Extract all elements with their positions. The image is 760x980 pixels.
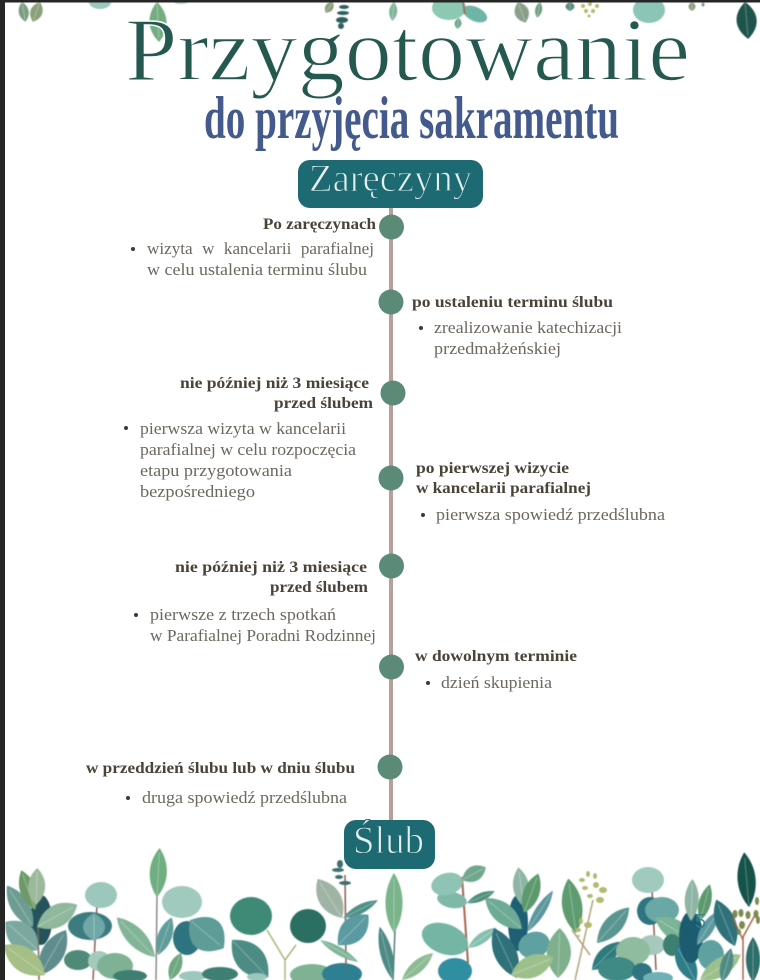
step 3: nie później niż 3 miesiące: przed ślubem bbox=[274, 395, 374, 412]
end box: Ślub: Ślub bbox=[353, 818, 424, 862]
start box: Zaręczyny: Zaręczyny bbox=[309, 157, 472, 200]
step 7: w przeddzień ślubu: druga spowiedź przedślubna bbox=[142, 788, 348, 807]
step 6: w dowolnym terminie: dzień skupienia bbox=[441, 673, 553, 692]
step 5: nie później niż 3 miesiące: nie później niż 3 miesiące bbox=[175, 559, 367, 576]
step 4: po pierwszej wizycie bbox=[378, 460, 666, 524]
step 3: nie później niż 3 miesiące: nie później niż 3 miesiące bbox=[180, 375, 369, 392]
step 3: nie później niż 3 miesiące: bezpośredniego bbox=[140, 482, 255, 501]
step 3: nie później niż 3 miesiące: parafialnej w celu rozpoczęcia bbox=[140, 440, 357, 459]
step 1: Po zaręczynach: wizyta w kancelarii parafialnej bbox=[147, 239, 374, 258]
step 5: nie później niż 3 miesiące: w Parafialnej Poradni Rodzinnej bbox=[150, 626, 376, 645]
step 7: w przeddzień ślubu: w przeddzień ślubu lub w dniu ślubu bbox=[86, 760, 355, 777]
step 6: w dowolnym terminie bbox=[379, 648, 577, 692]
step 1: Po zaręczynach bbox=[131, 214, 404, 279]
bottom foliage border bbox=[0, 848, 760, 980]
step 4: po pierwszej wizycie: w kancelarii parafialnej bbox=[416, 480, 591, 497]
step 5: nie później niż 3 miesiące: przed ślubem bbox=[270, 579, 369, 596]
foliage: stem with round leaves bbox=[417, 861, 500, 980]
step 6: w dowolnym terminie: w dowolnym terminie bbox=[415, 648, 577, 665]
foliage: round eucalyptus bbox=[64, 882, 147, 980]
step 3: nie później niż 3 miesiące bbox=[124, 375, 406, 501]
foliage: tall leaf group bbox=[110, 848, 238, 980]
step 2: po ustaleniu terminu ślubu: po ustaleniu terminu ślubu bbox=[412, 294, 613, 311]
foliage: left cluster bbox=[0, 868, 83, 980]
foliage: far right cluster bbox=[679, 851, 760, 980]
step 5: nie później niż 3 miesiące: pierwsze z trzech spotkań bbox=[150, 605, 336, 624]
step 5: nie później niż 3 miesiące bbox=[134, 554, 404, 645]
foliage: sprig near centre bbox=[308, 860, 380, 965]
top foliage border bbox=[17, 0, 758, 42]
step 1: Po zaręczynach: Po zaręczynach bbox=[263, 216, 376, 233]
step 2: po ustaleniu terminu ślubu: zrealizowanie katechizacji bbox=[434, 318, 622, 337]
title: Przygotowanie bbox=[125, 1, 690, 100]
step 1: Po zaręczynach: w celu ustalenia terminu ślubu bbox=[147, 260, 367, 279]
foliage: centre tall leaf bbox=[374, 873, 437, 980]
foliage: mixed cluster bbox=[479, 866, 572, 980]
step 2: po ustaleniu terminu ślubu: przedmałżeńskiej bbox=[434, 339, 561, 358]
step 2: po ustaleniu terminu ślubu bbox=[378, 290, 622, 358]
step 4: po pierwszej wizycie: pierwsza spowiedź przedślubna bbox=[436, 505, 666, 524]
timeline line bbox=[389, 205, 393, 823]
foliage: seed sprig bbox=[558, 871, 636, 980]
foliage: dark round leaves bbox=[222, 897, 362, 980]
step 3: nie później niż 3 miesiące: etapu przygotowania bbox=[140, 461, 293, 480]
step 7: w przeddzień ślubu bbox=[86, 754, 402, 807]
step 4: po pierwszej wizycie: po pierwszej wizycie bbox=[416, 460, 569, 477]
foliage: right cluster bbox=[586, 867, 704, 980]
end box: Ślub bbox=[344, 818, 435, 869]
step 3: nie później niż 3 miesiące: pierwsza wizyta w kancelarii bbox=[140, 419, 346, 438]
stray numeral on foliage: 5 bbox=[695, 911, 706, 933]
